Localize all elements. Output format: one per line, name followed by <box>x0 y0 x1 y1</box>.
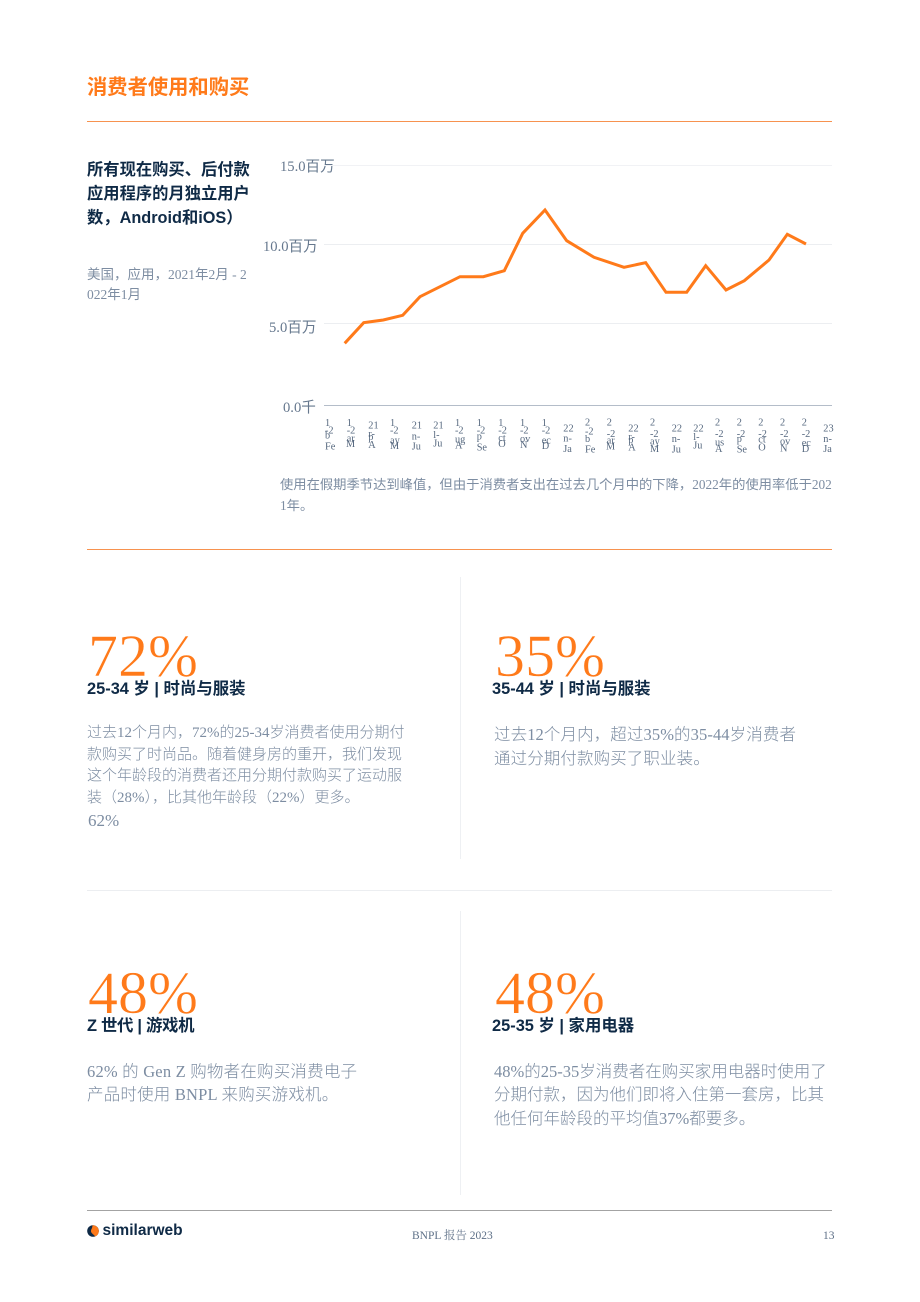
x axis month labels: 2 <box>715 417 720 428</box>
x axis month labels: Se <box>737 445 747 456</box>
x axis month labels: N <box>520 440 528 451</box>
x axis month labels: 22 <box>628 423 639 434</box>
description: 款购买了时尚品。随着健身房的重开，我们发现 <box>87 746 402 762</box>
x axis month labels: -2 <box>520 426 529 437</box>
x axis month labels: n- <box>412 431 421 442</box>
icon: logo mark <box>87 1225 99 1237</box>
x axis month labels: -2 <box>802 429 810 440</box>
x axis month labels: 2 <box>650 417 655 428</box>
description: 通过分期付款购买了职业装。 <box>494 749 710 768</box>
x axis month labels: ec <box>802 438 811 449</box>
x axis month labels: -2 <box>325 426 334 436</box>
stat 72%: 72% <box>88 623 198 689</box>
x axis month labels: p <box>477 431 482 442</box>
x axis month labels: 22 <box>693 423 704 434</box>
x axis month labels: 22 <box>563 423 574 434</box>
x axis month labels: Ju <box>412 442 421 453</box>
x axis month labels: ay <box>390 436 401 447</box>
y axis label 5.0: 5.0百万 <box>269 320 316 336</box>
x axis month labels: Ju <box>433 438 442 449</box>
x axis month labels: -2 <box>585 426 594 438</box>
stat 48%: 48% <box>495 960 605 1026</box>
description: 分期付款，因为他们即将入住第一套房，比其 <box>494 1085 824 1104</box>
description <box>494 1062 827 1128</box>
x axis month labels: 23 <box>823 423 834 434</box>
x axis month labels: n- <box>672 434 681 445</box>
x axis month labels: 1 <box>347 418 352 429</box>
segment heading: 35-44 岁 | 时尚与服装 <box>492 680 651 698</box>
x axis month labels: r- <box>628 432 636 443</box>
x axis month labels: 21 <box>433 421 444 432</box>
x axis month labels: p <box>628 435 633 446</box>
x axis month labels: Fe <box>325 442 336 453</box>
footnote figure 62%: 62% <box>88 811 119 830</box>
footer logo: similarweb <box>87 1222 183 1239</box>
stat 35%: 35% <box>495 623 605 689</box>
x axis month labels: -2 <box>607 429 615 440</box>
x axis month labels: -2 <box>650 429 659 440</box>
x axis month labels: 1 <box>520 418 525 429</box>
x axis month labels: ug <box>455 435 465 446</box>
y axis label 10.0: 10.0百万 <box>263 239 318 255</box>
data line <box>345 210 806 343</box>
description <box>87 1062 357 1104</box>
x axis month labels: M <box>390 441 399 452</box>
description: 他任何年龄段的平均值37%都要多。 <box>494 1109 755 1128</box>
segment heading: Z 世代 | 游戏机 <box>87 1017 194 1035</box>
x axis month labels: -2 <box>347 426 355 437</box>
x axis month labels: -2 <box>455 426 464 437</box>
x axis month labels: 22 <box>672 423 682 434</box>
y axis label 15.0: 15.0百万 <box>280 159 335 175</box>
x axis month labels: N <box>780 443 788 454</box>
x axis month labels: -2 <box>390 426 399 437</box>
description: 48%的25-35岁消费者在购买家用电器时使用了 <box>494 1062 827 1080</box>
chart subtitle: 美国，应用，2021年2月 - 2 <box>87 267 247 282</box>
title: 消费者使用和购买 <box>87 77 249 99</box>
x axis month labels: M <box>346 439 355 450</box>
chart heading: 所有现在购买、后付款 <box>87 161 250 179</box>
description <box>494 725 796 768</box>
chart caption <box>280 477 832 513</box>
x axis month labels: 21 <box>368 421 379 432</box>
x axis month labels: 21 <box>412 421 422 432</box>
x axis month labels: 2 <box>737 417 742 428</box>
x axis month labels: b <box>585 434 590 445</box>
panel: 25-34 fashion <box>87 623 404 830</box>
stat 48%: 48% <box>88 960 198 1026</box>
x axis month labels <box>325 417 834 456</box>
panel: 25-35 home appliances <box>492 960 827 1128</box>
x axis month labels: ar <box>607 436 615 447</box>
x axis month labels: Se <box>477 442 487 453</box>
description: 62% 的 Gen Z 购物者在购买消费电子 <box>87 1062 357 1080</box>
x axis month labels: ct <box>758 435 766 446</box>
x axis month labels: Ju <box>693 441 702 452</box>
x axis month labels: ov <box>520 434 531 445</box>
x axis month labels: ar <box>347 433 355 444</box>
description <box>87 724 404 806</box>
x axis month labels: -2 <box>542 426 550 437</box>
x axis month labels: p <box>368 432 373 443</box>
x axis month labels: A <box>628 442 636 453</box>
x axis month labels: l- <box>693 432 700 443</box>
logo wordmark: similarweb <box>102 1222 183 1239</box>
x axis month labels: ec <box>542 436 551 447</box>
chart subtitle: 022年1月 <box>87 287 141 302</box>
x axis month labels: Ja <box>823 444 832 455</box>
footer report name: BNPL 报告 2023 <box>412 1230 493 1242</box>
x axis month labels: M <box>606 442 615 453</box>
x axis month labels: M <box>650 444 659 455</box>
segment heading: 25-34 岁 | 时尚与服装 <box>87 680 246 698</box>
x axis month labels: 1 <box>542 418 547 429</box>
x axis month labels: -2 <box>715 429 724 440</box>
chart caption: 1年。 <box>280 498 313 513</box>
chart heading: 应用程序的月独立用户 <box>87 185 250 203</box>
x axis month labels: Ja <box>563 444 572 455</box>
segment heading: 25-35 岁 | 家用电器 <box>492 1017 634 1035</box>
x axis month labels: Fe <box>585 445 596 456</box>
x axis month labels: 2 <box>758 417 763 428</box>
chart heading: 数，Android和iOS） <box>87 209 243 227</box>
x axis month labels: -2 <box>477 426 485 437</box>
x axis month labels: p <box>737 434 742 445</box>
x axis month labels: 1 <box>477 418 482 429</box>
description: 过去12个月内，超过35%的35-44岁消费者 <box>494 725 796 744</box>
x axis month labels: 2 <box>585 417 590 428</box>
x axis month labels: 2 <box>607 417 612 428</box>
x axis month labels: n- <box>563 433 572 444</box>
x axis month labels: -2 <box>780 429 789 440</box>
x axis month labels: 1 <box>390 418 395 429</box>
chart caption: 使用在假期季节达到峰值，但由于消费者支出在过去几个月中的下降，2022年的使用率低于202 <box>280 477 832 492</box>
description: 过去12个月内，72%的25-34岁消费者使用分期付 <box>87 725 404 741</box>
x axis month labels: A <box>455 441 463 452</box>
x axis month labels: A <box>368 440 376 451</box>
x axis month labels: us <box>715 437 724 448</box>
x axis month labels: D <box>542 441 550 452</box>
x axis month labels: ct <box>498 433 506 444</box>
x axis month labels: O <box>498 439 506 450</box>
y axis label 0: 0.0千 <box>283 400 316 416</box>
x axis month labels: 1 <box>325 418 330 429</box>
x axis month labels: b <box>325 430 330 442</box>
line chart: monthly unique users <box>324 165 834 456</box>
description: 产品时使用 BNPL 来购买游戏机。 <box>87 1085 338 1104</box>
x axis month labels: D <box>802 444 810 455</box>
x axis month labels: 2 <box>802 417 807 428</box>
x axis month labels: 2 <box>780 417 785 428</box>
x axis month labels: O <box>758 442 766 453</box>
x axis month labels: 1 <box>455 418 460 429</box>
panel: Gen Z gaming <box>87 960 357 1104</box>
page number: 13 <box>823 1230 834 1242</box>
x axis month labels: r- <box>368 429 376 440</box>
panel: 35-44 fashion <box>492 623 796 768</box>
x axis month labels: ay <box>650 436 661 447</box>
x axis month labels: Ju <box>672 445 681 456</box>
x axis month labels: l- <box>433 430 440 441</box>
x axis month labels: -2 <box>758 429 767 440</box>
description: 装（28%），比其他年龄段（22%）更多。 <box>87 790 360 806</box>
description: 这个年龄段的消费者还用分期付款购买了运动服 <box>87 768 402 784</box>
x axis month labels: n- <box>823 434 832 445</box>
chart subtitle <box>87 267 247 302</box>
x axis month labels: -2 <box>737 429 745 440</box>
x axis month labels: ov <box>780 436 791 447</box>
chart heading <box>87 160 250 227</box>
x axis month labels: 1 <box>498 418 503 429</box>
x axis month labels: -2 <box>498 426 507 437</box>
x axis month labels: A <box>715 444 723 455</box>
